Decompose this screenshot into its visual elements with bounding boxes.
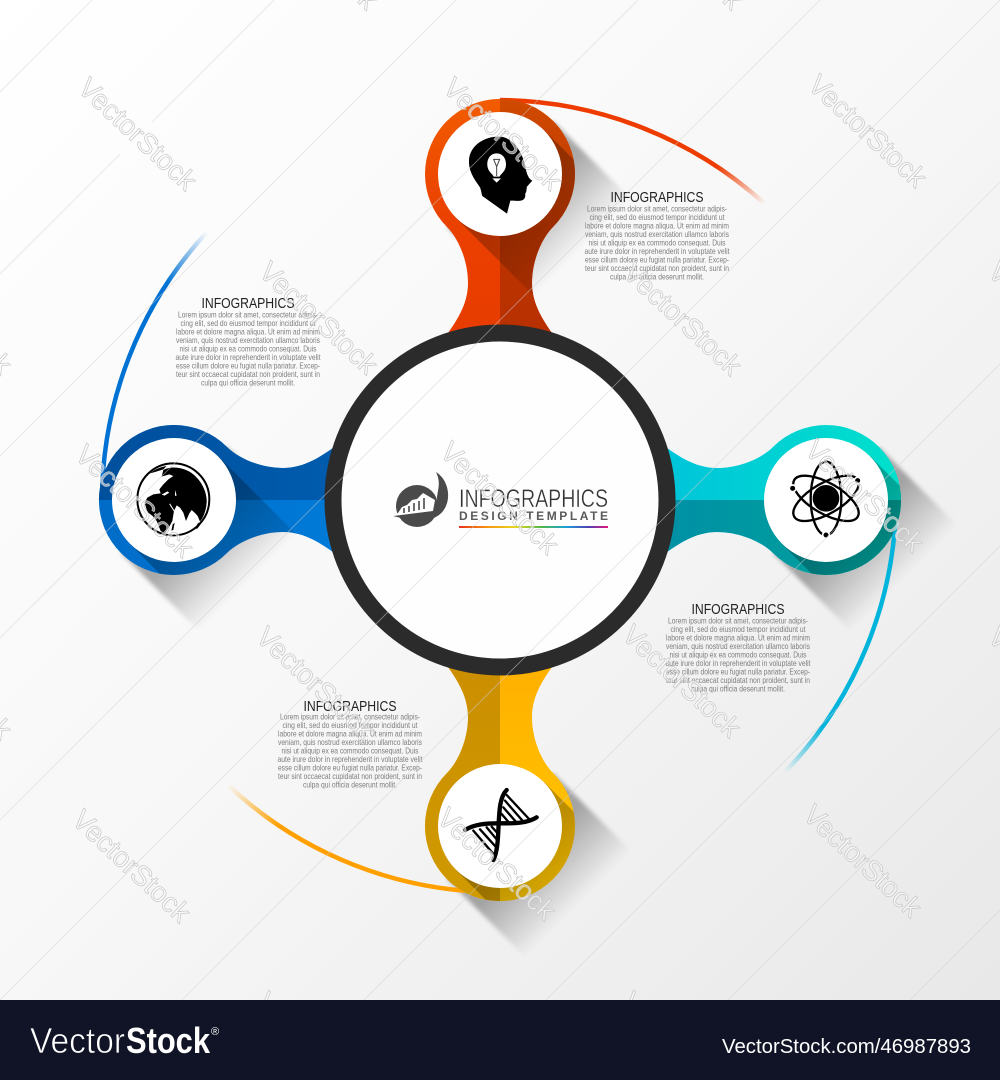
watermark text: VectorStock <box>616 619 747 744</box>
footer bar: ® <box>211 1026 219 1038</box>
center title: DESIGN TEMPLATE <box>459 509 608 523</box>
center circle <box>333 333 667 667</box>
footer bar: Vector <box>30 1020 125 1061</box>
text block: left: teur sint occaecat cupidatat non proident, sunt in <box>176 370 320 379</box>
text block: top: labore et dolore magna aliqua. Ut enim ad minim <box>585 222 729 231</box>
watermark text: VectorStock <box>253 256 384 381</box>
text block: top: nisi ut aliquip ex ea commodo consequat. Duis <box>588 238 726 248</box>
watermark text: VectorStock <box>66 804 197 929</box>
text block: bottom: aute irure dolor in reprehenderit in voluptate velit <box>278 755 423 764</box>
text block: left: culpa qui officia deserunt mollit. <box>201 378 295 387</box>
text block: right: labore et dolore magna aliqua. Ut enim ad minim <box>666 634 810 643</box>
center title: INFOGRAPHICS <box>459 485 608 513</box>
panel: top node, orange <box>425 98 575 332</box>
arc: blue <box>102 232 207 500</box>
arc: yellow <box>228 785 500 892</box>
text block: bottom: culpa qui officia deserunt mollit. <box>303 780 397 789</box>
text block: bottom: cing elit, sed do eiusmod tempor incididunt ut <box>282 721 418 730</box>
text block: left: INFOGRAPHICS <box>202 296 294 312</box>
text block: right: esse cillum dolore eu fugiat nulla pariatur. Excep- <box>666 667 810 676</box>
footer bar: VectorStock.com/46987893 <box>722 1035 971 1058</box>
watermark text: VectorStock <box>797 799 928 924</box>
text block: right: aute irure dolor in reprehenderit in voluptate velit <box>666 659 811 668</box>
text block: left: labore et dolore magna aliqua. Ut enim ad minim <box>176 328 320 337</box>
watermark text: VectorStock <box>72 72 203 197</box>
watermark text: VectorStock <box>437 72 568 197</box>
text block: top: culpa qui officia deserunt mollit. <box>610 272 704 281</box>
icon: atom <box>787 462 865 538</box>
text block: right: teur sint occaecat cupidatat non proident, sunt in <box>666 676 810 685</box>
text block: top: INFOGRAPHICS <box>610 190 704 206</box>
text block: right: INFOGRAPHICS <box>692 602 784 618</box>
text block: bottom: nisi ut aliquip ex ea commodo consequat. Duis <box>282 746 418 756</box>
arc: orange <box>500 100 765 204</box>
text block: bottom: teur sint occaecat cupidatat non proident, sunt in <box>278 772 422 781</box>
icon: dna <box>465 790 537 860</box>
text block: right: Lorem ipsum dolor sit amet, consectetur adipis- <box>668 617 808 626</box>
text block: bottom: veniam, quis nostrud exercitation ullamco laboris <box>278 738 422 747</box>
text block: bottom: INFOGRAPHICS <box>304 699 396 715</box>
long shadows under the nodes <box>121 121 969 969</box>
text block: left: Lorem ipsum dolor sit amet, consectetur adipis- <box>178 311 318 320</box>
text block: top: aute irure dolor in reprehenderit in voluptate velit <box>584 247 730 256</box>
watermark text: VectorStock <box>69 439 200 564</box>
text block: left: aute irure dolor in reprehenderit in voluptate velit <box>176 353 321 362</box>
panel: left node, blue <box>98 425 332 575</box>
watermark text: VectorStock <box>799 434 930 559</box>
icon: head with light bulb <box>469 137 532 214</box>
text block: right: culpa qui officia deserunt mollit. <box>691 684 785 693</box>
watermark text: VectorStock <box>250 621 381 746</box>
arc: teal <box>785 500 896 772</box>
footer bar <box>0 1000 1000 1080</box>
panel: right node, teal <box>668 425 902 575</box>
watermark text: VectorStock <box>802 69 933 194</box>
text block: left: esse cillum dolore eu fugiat nulla pariatur. Excep- <box>176 361 320 370</box>
watermark text: VectorStock <box>431 802 562 927</box>
text block: bottom <box>278 699 423 789</box>
text block: left: veniam, quis nostrud exercitation ullamco laboris <box>176 336 320 345</box>
text block: right: nisi ut aliquip ex ea commodo consequat. Duis <box>670 650 806 660</box>
text block: top: teur sint occaecat cupidatat non proident, sunt in <box>585 264 729 273</box>
watermark text: VectorStock <box>434 436 565 561</box>
text block: top: esse cillum dolore eu fugiat nulla pariatur. Excep- <box>585 255 729 264</box>
panel: bottom node, yellow <box>425 668 575 902</box>
footer bar: Stock <box>126 1020 211 1061</box>
text block: top: cing elit, sed do eiusmod tempor incididunt ut <box>590 213 725 222</box>
text block: bottom: labore et dolore magna aliqua. Ut enim ad minim <box>278 730 422 739</box>
text block: left: nisi ut aliquip ex ea commodo consequat. Duis <box>180 344 316 354</box>
text block: left: cing elit, sed do eiusmod tempor incididunt ut <box>180 319 316 328</box>
center title <box>459 485 608 528</box>
text block: bottom: Lorem ipsum dolor sit amet, consectetur adipis- <box>280 713 420 722</box>
text block: top <box>584 190 730 281</box>
text block: bottom: esse cillum dolore eu fugiat nulla pariatur. Excep- <box>278 763 422 772</box>
text block: right <box>666 602 811 693</box>
text block: top: Lorem ipsum dolor sit amet, consectetur adipis- <box>587 205 727 214</box>
text block: left <box>176 296 321 387</box>
text block: right: cing elit, sed do eiusmod tempor incididunt ut <box>670 625 806 634</box>
text block: right: veniam, quis nostrud exercitation ullamco laboris <box>666 642 810 651</box>
watermark text: VectorStock <box>617 257 748 382</box>
icon: globe <box>137 463 209 535</box>
center logo icon <box>393 472 448 527</box>
text block: top: veniam, quis nostrud exercitation ullamco laboris <box>585 230 729 239</box>
